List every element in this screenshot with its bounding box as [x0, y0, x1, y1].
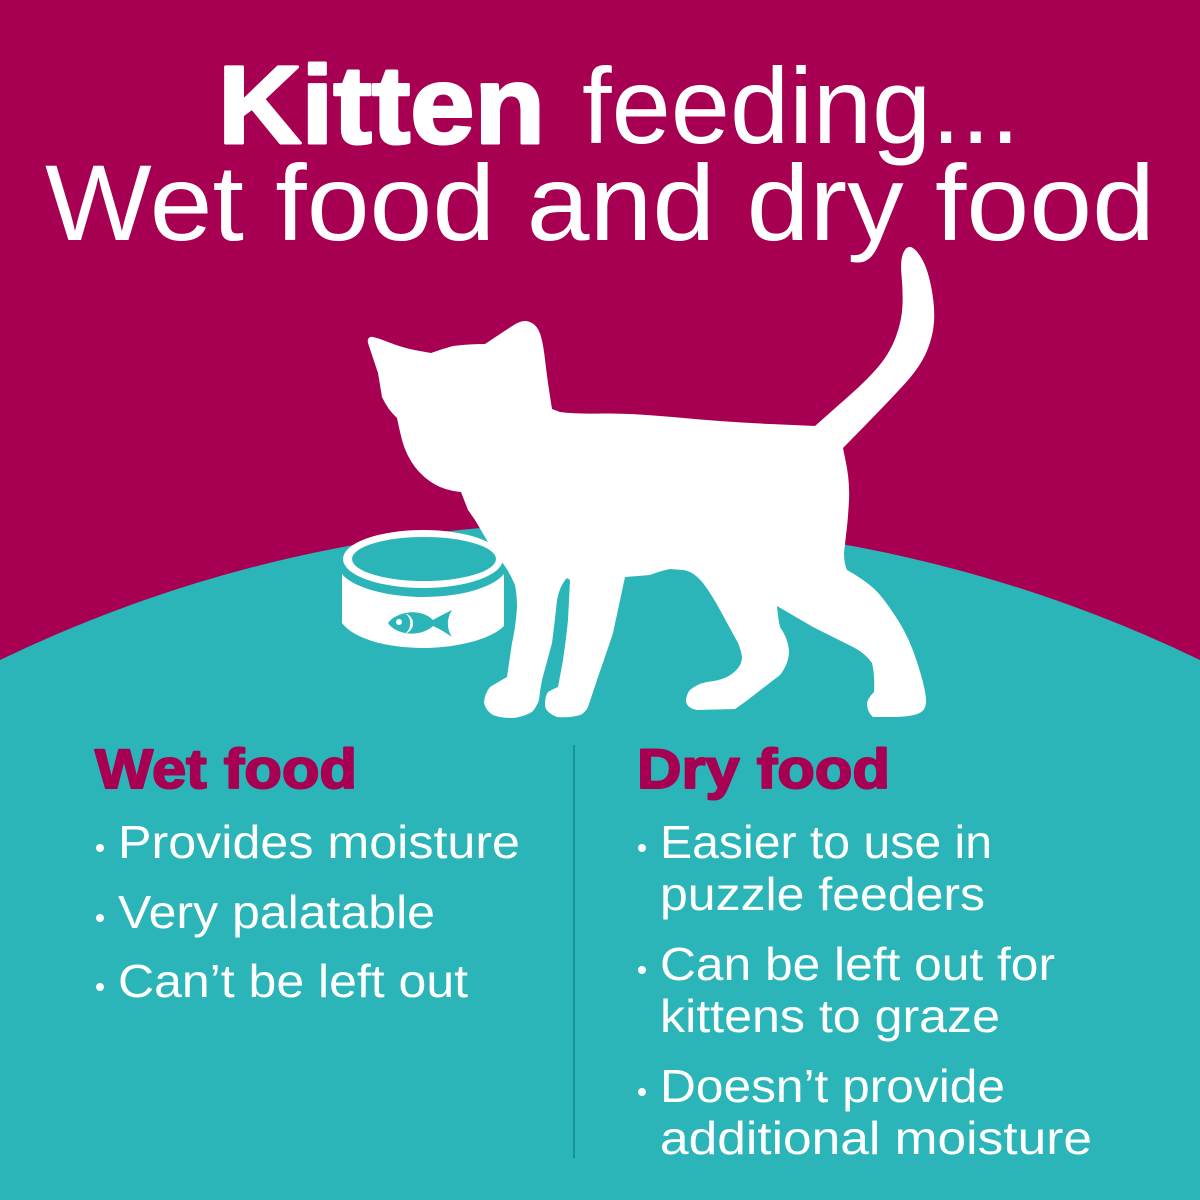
list: wet food points — [96, 816, 520, 1007]
list: wet food points: Very palatable — [118, 886, 435, 938]
list: dry food points: kittens to graze — [660, 990, 1000, 1042]
heading: dry food: Dry food — [637, 737, 890, 800]
title: feeding... — [582, 45, 1020, 166]
title: Kitten — [218, 44, 545, 167]
title: Wet food and dry food — [45, 142, 1155, 263]
list: wet food points: Can’t be left out — [118, 955, 468, 1007]
list: dry food points: Easier to use in — [660, 816, 992, 868]
list: dry food points: additional moisture — [660, 1112, 1092, 1164]
heading: wet food: Wet food — [95, 737, 357, 800]
title — [45, 44, 1155, 263]
icon: food bowl with fish — [342, 530, 504, 648]
icon: kitten silhouette — [368, 247, 934, 718]
panel: dry food — [637, 737, 1092, 1164]
panel: wet food — [95, 737, 520, 1007]
list: wet food points: Provides moisture — [118, 816, 520, 868]
list: dry food points: Can be left out for — [660, 938, 1055, 990]
list: dry food points: Doesn’t provide — [660, 1060, 1005, 1112]
teal ground arc — [0, 523, 1200, 1200]
list: dry food points: puzzle feeders — [660, 868, 985, 920]
icon: fish — [388, 610, 452, 637]
list: dry food points — [638, 816, 1092, 1164]
